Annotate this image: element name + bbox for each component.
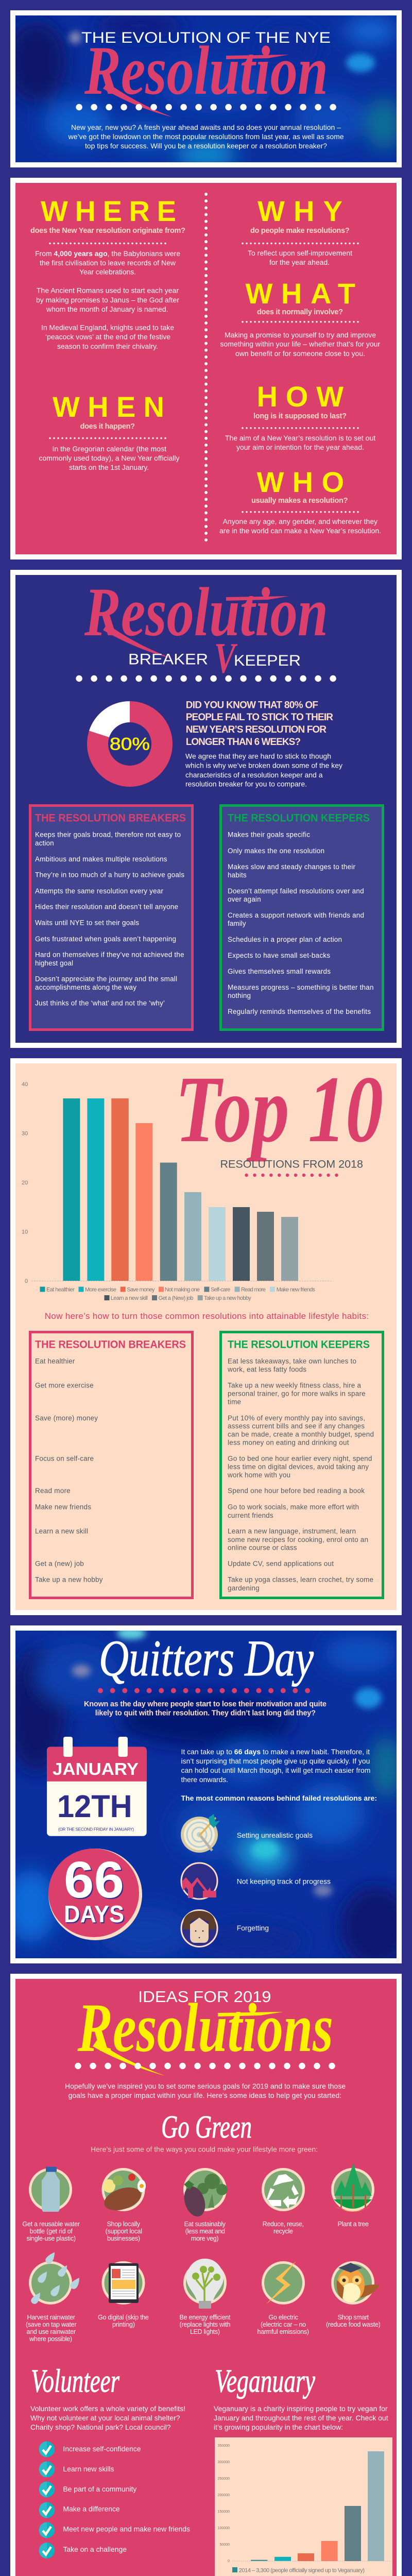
- did you know heading: PEOPLE FAIL TO STICK TO THEIR: [186, 712, 333, 723]
- checklist: Increase self-confidence: [63, 2445, 141, 2453]
- box: keepers list: Update CV, send applications out: [228, 1560, 334, 1567]
- did you know heading: LONGER THAN 6 WEEKS?: [186, 737, 301, 748]
- checklist: Make a difference: [63, 2505, 120, 2513]
- box: resolution breakers: Gets frustrated when goals aren’t happening: [35, 935, 176, 943]
- block: when: starts on the 1st January.: [69, 463, 149, 471]
- box: resolution keepers: [220, 806, 383, 1029]
- subheading: go green: Go Green: [161, 2110, 252, 2145]
- box: resolution breakers: Doesn’t appreciate the journey and the small: [35, 975, 177, 983]
- box: resolution keepers: Makes slow and steady changes to their: [228, 863, 355, 871]
- box: resolution keepers: Schedules in a proper plan of action: [228, 936, 342, 943]
- calendar icon: (OR THE SECOND FRIDAY IN JANUARY): [58, 1827, 134, 1832]
- chart legend: Read more: [241, 1287, 266, 1293]
- block: when: commonly used today), a New Year officially: [39, 454, 179, 462]
- script title: Resolutions: [77, 1990, 333, 2066]
- box: keepers list: time: [228, 1398, 241, 1406]
- section: volunteer: Why not volunteer at your local animal shelter?: [30, 2414, 180, 2422]
- did you know heading: DID YOU KNOW THAT 80% OF: [186, 700, 318, 710]
- bar chart: top 10: 0: [25, 1278, 28, 1284]
- icon: lightning: [263, 2261, 304, 2304]
- label: [26, 2314, 76, 2343]
- box: keepers list: Eat less takeaways, take own lunches to: [228, 1357, 356, 1365]
- block: why: do people make resolutions?: [250, 227, 350, 235]
- label: [22, 2221, 80, 2242]
- block: how: your aim or intention for the year ahead.: [236, 443, 364, 451]
- icon: rainwater: [30, 2252, 79, 2304]
- 66 days badge: DAYS: [64, 1901, 124, 1927]
- section: veganuary: January and throughout the rest of the year. Check out: [214, 2414, 388, 2422]
- habit text: isn’t surprising that most people give up quite quickly. If you: [181, 1757, 370, 1765]
- chart legend: Self-care: [211, 1287, 230, 1293]
- bar chart: veganuary: 350000: [218, 2444, 230, 2448]
- chart legend: [40, 1287, 315, 1301]
- box: keepers list: work home with you: [227, 1471, 290, 1479]
- block: who: [219, 466, 381, 535]
- box: keepers list: some new recipes for cooking, enrol onto an: [228, 1536, 368, 1544]
- block: where: [30, 195, 185, 350]
- box: keepers list: personal trainer, go for more walks in spare: [228, 1390, 366, 1398]
- block: what: does it normally involve?: [257, 308, 343, 316]
- label: [184, 2221, 226, 2242]
- label: [326, 2314, 381, 2328]
- habit text: It can take up to 66 days to make a new habit. Therefore, it: [181, 1748, 370, 1756]
- block: where: the first civilisation to leave records of New: [40, 259, 176, 267]
- chart legend: Take up a new hobby: [204, 1295, 251, 1301]
- box: resolution breakers: accomplishments along the way: [35, 984, 136, 991]
- block: when: WHEN: [53, 391, 164, 423]
- label: (save on tap water: [26, 2321, 76, 2328]
- box: breakers list: Get a (new) job: [35, 1560, 84, 1567]
- breaker v keeper heading: BREAKER: [128, 651, 208, 668]
- chart legend: Eat healthier: [46, 1287, 75, 1293]
- section: volunteer: Volunteer work offers a whole variety of benefits!: [30, 2404, 185, 2413]
- explanation text: [185, 752, 342, 788]
- block: where: The Ancient Romans used to start each year: [37, 286, 179, 295]
- box: keepers list: Put 10% of every monthly pay into savings,: [228, 1414, 365, 1422]
- icon: tablet: [103, 2263, 144, 2303]
- explanation text: characteristics of a resolution keeper and a: [185, 771, 323, 779]
- block: where: does the New Year resolution originate from?: [30, 227, 185, 235]
- callout line: Now here’s how to turn those common resolutions into attainable lifestyle habits:: [45, 1311, 369, 1321]
- block: how: HOW: [256, 380, 344, 413]
- section: veganuary: [214, 2363, 392, 2576]
- box: resolution breakers: They’re in too much of a hurry to achieve goals: [35, 871, 184, 879]
- icon: vegetables: [181, 2169, 228, 2219]
- block: why: WHY: [258, 195, 342, 227]
- label: and use rainwater: [27, 2328, 76, 2335]
- bar chart: top 10: 10: [22, 1229, 28, 1235]
- block: where: In Medieval England, knights used to take: [41, 324, 174, 332]
- bar chart: veganuary: 150000: [218, 2510, 230, 2514]
- chart legend: More exercise: [85, 1287, 116, 1293]
- bokeh background: [15, 1631, 397, 1958]
- box: resolution keepers: nothing: [228, 992, 251, 999]
- breaker v keeper heading: [128, 634, 301, 682]
- script title: Resolution: [84, 574, 328, 651]
- label: Shop locally: [107, 2221, 141, 2228]
- label: [258, 2314, 309, 2335]
- label: printing): [112, 2321, 135, 2328]
- box: breakers list: Learn a new skill: [35, 1528, 88, 1535]
- block: where: by making promises to Janus – the God after: [36, 296, 179, 304]
- block: where: whom the month of January is named.: [46, 305, 168, 313]
- block: who: Anyone any age, any gender, and wherever they: [223, 517, 377, 526]
- section: volunteer: [30, 2363, 190, 2558]
- icon: forgetting face: [181, 1910, 217, 1946]
- box: resolution breakers: Just thinks of the ‘what’ and not the ‘why’: [35, 999, 165, 1007]
- label: Reduce, reuse,: [263, 2221, 304, 2228]
- icon: recycle: [263, 2169, 304, 2210]
- box: resolution keepers: habits: [228, 871, 247, 879]
- box: breakers list: Get more exercise: [35, 1382, 94, 1389]
- box: keepers list: less time on digital devices, avoid taking any: [228, 1463, 369, 1471]
- section: volunteer: Charity shop? National park? Local council?: [30, 2423, 171, 2431]
- bar chart: top 10: [22, 1081, 333, 1284]
- block: where: ‘peacock vows’ at the end of the festive: [45, 333, 170, 341]
- label: [179, 2314, 231, 2335]
- bokeh background: [5, 13, 401, 167]
- block: where: WHERE: [41, 195, 176, 227]
- box: resolution breakers: Hides their resolution and doesn’t tell anyone: [35, 903, 178, 911]
- habit text: can hold out until March though, it will get much easier from: [181, 1766, 370, 1774]
- icon: progress: [181, 1863, 217, 1899]
- label: Go electric: [268, 2314, 298, 2321]
- section: volunteer: Volunteer: [31, 2363, 120, 2399]
- label: where possible): [29, 2335, 72, 2343]
- block: what: WHAT: [245, 277, 355, 310]
- box: keepers list: less money on eating and drinking out: [228, 1439, 349, 1447]
- bar chart: veganuary: 200000: [218, 2494, 230, 2497]
- label: (less meat and: [185, 2228, 225, 2235]
- reason: unrealistic goals: Setting unrealistic goals: [237, 1831, 313, 1839]
- checklist: Meet new people and make new friends: [63, 2525, 190, 2533]
- box: breakers list: Eat healthier: [35, 1357, 75, 1365]
- heading: THE EVOLUTION OF THE NYE: [81, 29, 331, 46]
- box: resolution keepers: Only makes the one resolution: [228, 847, 324, 855]
- label: bottle (get rid of: [30, 2228, 73, 2235]
- box: breakers list: Focus on self-care: [35, 1455, 94, 1462]
- checklist: Learn new skills: [63, 2465, 114, 2473]
- block: what: Making a promise to yourself to try and improve: [225, 331, 376, 339]
- calendar icon: JANUARY: [53, 1759, 139, 1778]
- block: what: own benefit or for someone close to you.: [235, 349, 365, 358]
- bar chart: veganuary: 300000: [218, 2461, 230, 2464]
- bar chart: veganuary: 50000: [220, 2543, 230, 2547]
- block: what: something within your life – whether that’s for your: [220, 340, 380, 348]
- box: resolution breakers: highest goal: [35, 959, 73, 967]
- block: when: In the Gregorian calendar (the most: [53, 445, 166, 453]
- explanation text: which is why we’ve broken down some of the key: [185, 761, 342, 770]
- checklist: Take on a challenge: [63, 2545, 127, 2553]
- icon: owl: [333, 2263, 380, 2303]
- label: Harvest rainwater: [27, 2314, 75, 2321]
- block: how: [225, 380, 375, 451]
- box: resolution breakers: [30, 806, 193, 1029]
- box: keepers list: Spend one hour before bed reading a book: [228, 1487, 365, 1495]
- box: resolution keepers: THE RESOLUTION KEEPERS: [228, 812, 370, 824]
- intro: Hopefully we’ve inspired you to set some serious goals for 2019 and to make sure those: [65, 2082, 346, 2090]
- breaker v keeper heading: V: [214, 634, 237, 682]
- box: breakers list: Save (more) money: [35, 1414, 98, 1422]
- block: when: [39, 391, 179, 471]
- section: veganuary: it’s growing popularity in the chart below:: [214, 2423, 343, 2431]
- box: resolution keepers: Gives themselves small rewards: [228, 968, 331, 975]
- intro text: top tips for success. Will you be a resolution keeper or a resolution breaker?: [85, 142, 327, 150]
- label: [263, 2221, 304, 2235]
- box: resolution keepers: over again: [228, 895, 261, 903]
- habit text: [181, 1748, 377, 1802]
- box: keepers list: Learn a new language, instrument, learn: [228, 1528, 356, 1535]
- calendar icon: [47, 1737, 147, 1836]
- label: Eat sustainably: [184, 2221, 226, 2228]
- label: Shop smart: [338, 2314, 369, 2321]
- box: resolution keepers: Expects to have small set-backs: [228, 952, 330, 959]
- habit text: there onwards.: [181, 1775, 228, 1784]
- panel: title hero: [5, 10, 402, 167]
- intro: [84, 1700, 327, 1718]
- box: keepers list: current friends: [228, 1512, 273, 1519]
- label: Go digital (skip the: [98, 2314, 149, 2321]
- reason: forgetting: Forgetting: [237, 1924, 269, 1932]
- intro: goals have a proper impact within your life. Here’s some ideas to help get you started:: [68, 2091, 341, 2099]
- box: resolution breakers: Ambitious and makes multiple resolutions: [35, 855, 167, 863]
- box: keepers list: Go to work socials, make more effort with: [228, 1503, 359, 1511]
- block: why: for the year ahead.: [269, 258, 330, 266]
- subheading: go green: Here’s just some of the ways you could make your lifestyle more green:: [91, 2145, 318, 2154]
- box: resolution keepers: family: [228, 920, 246, 927]
- icon: energy bulb: [184, 2259, 226, 2309]
- label: recycle: [273, 2228, 293, 2235]
- label: LED lights): [190, 2328, 220, 2335]
- label: harmful emissions): [258, 2328, 309, 2335]
- block: why: To reflect upon self-improvement: [248, 249, 352, 257]
- bar chart: top 10: 20: [22, 1180, 28, 1186]
- icon: target: [181, 1814, 220, 1853]
- box: breakers list: [30, 1332, 193, 1598]
- block: who: WHO: [256, 466, 344, 498]
- box: breakers list: Read more: [35, 1487, 71, 1495]
- intro text: New year, new you? A fresh year ahead awaits and so does your annual resolution –: [71, 123, 341, 131]
- subtitle: RESOLUTIONS FROM 2018: [220, 1158, 363, 1171]
- box: keepers list: online course or class: [228, 1544, 297, 1552]
- label: (electric car – no: [261, 2321, 306, 2328]
- 66 days badge: DAYS: [65, 1902, 125, 1928]
- block: where: From 4,000 years ago, the Babylonians were: [35, 249, 180, 258]
- panel: breaker v keeper: [10, 570, 402, 1048]
- label: (replace lights with: [179, 2321, 231, 2328]
- block: when: does it happen?: [80, 422, 135, 431]
- label: (support local: [106, 2228, 142, 2235]
- label: [98, 2314, 149, 2328]
- box: keepers list: [220, 1332, 383, 1598]
- bar chart: veganuary: 100000: [218, 2527, 230, 2530]
- calendar icon: 12TH: [57, 1789, 132, 1824]
- intro: likely to quit with their resolution. They didn’t last long did they?: [95, 1709, 316, 1718]
- panel: ideas for 2019: [10, 1974, 402, 2576]
- 66 days badge: 66: [64, 1851, 124, 1909]
- box: breakers list: THE RESOLUTION BREAKERS: [35, 1338, 186, 1350]
- label: single-use plastic): [27, 2235, 76, 2242]
- box: resolution keepers: Creates a support network with friends and: [228, 911, 364, 919]
- bar chart: veganuary: [215, 2437, 392, 2576]
- box: breakers list: Make new friends: [35, 1503, 91, 1511]
- icon: local food: [101, 2169, 146, 2214]
- label: businesses): [107, 2235, 140, 2242]
- reason: tracking: Not keeping track of progress: [237, 1877, 331, 1886]
- box: resolution breakers: Keeps their goals broad, therefore not easy to: [35, 831, 181, 839]
- chart legend: Learn a new skill: [111, 1295, 148, 1301]
- box: resolution keepers: Makes their goals specific: [228, 831, 310, 839]
- bar chart: veganuary: 250000: [218, 2477, 230, 2481]
- script title: [77, 1990, 333, 2076]
- box: keepers list: gardening: [228, 1584, 260, 1592]
- bar chart: top 10: 40: [22, 1081, 28, 1088]
- checklist: Be part of a community: [63, 2485, 136, 2493]
- panel: where why what when how who: [10, 178, 402, 560]
- checklist: [39, 2442, 190, 2558]
- label: [106, 2221, 142, 2242]
- intro: [65, 2082, 346, 2099]
- label: Be energy efficient: [179, 2314, 231, 2321]
- chart legend: Make new friends: [277, 1287, 315, 1293]
- section: veganuary: Veganuary is a charity inspiring people to try vegan for: [214, 2404, 388, 2413]
- box: keepers list: assess current bills and see if any changes: [228, 1422, 365, 1430]
- box: resolution keepers: Regularly reminds themselves of the benefits: [228, 1008, 371, 1015]
- box: keepers list: work, eat less fatty foods: [227, 1366, 306, 1374]
- intro text: [68, 123, 344, 150]
- did you know heading: NEW YEAR’S RESOLUTION FOR: [186, 724, 327, 735]
- block: who: usually makes a resolution?: [251, 497, 348, 505]
- block: where: Year celebrations.: [79, 268, 136, 276]
- box: keepers list: Go to bed one hour earlier every night, spend: [228, 1455, 372, 1462]
- box: resolution breakers: action: [35, 839, 54, 847]
- 66 days badge: [48, 1849, 142, 1940]
- box: resolution keepers: Measures progress – something is better than: [228, 984, 374, 991]
- donut chart 80%: [89, 701, 162, 776]
- box: keepers list: Take up yoga classes, learn crochet, try some: [228, 1576, 373, 1584]
- chart legend: Save money: [127, 1287, 155, 1293]
- box: keepers list: can be made, create a monthly budget, spend: [228, 1430, 374, 1438]
- label: Plant a tree: [338, 2221, 369, 2228]
- section: veganuary: Veganuary: [215, 2363, 315, 2399]
- script title: Quitters Day: [99, 1630, 314, 1687]
- chart legend: Not making one: [165, 1287, 200, 1293]
- block: where: season to confirm their chivalry.: [57, 342, 158, 350]
- box: resolution breakers: Attempts the same resolution every year: [35, 887, 164, 895]
- box: keepers list: THE RESOLUTION KEEPERS: [228, 1338, 370, 1350]
- script title: Resolution: [84, 32, 328, 109]
- box: resolution keepers: Doesn’t attempt failed resolutions over and: [228, 887, 364, 895]
- bar chart: veganuary: 0: [228, 2560, 230, 2563]
- block: who: are in the world can make a New Year’s resolution.: [219, 527, 381, 535]
- box: resolution breakers: THE RESOLUTION BREAKERS: [35, 812, 186, 824]
- panel: top 10 resolutions: [10, 1057, 402, 1615]
- label: (reduce food waste): [326, 2321, 381, 2328]
- block: how: long is it supposed to last?: [253, 412, 347, 420]
- intro: Known as the day where people start to lose their motivation and quite: [84, 1700, 327, 1708]
- icon: trees: [333, 2163, 373, 2212]
- bar chart: top 10: 30: [22, 1131, 28, 1137]
- panel: quitters day: [5, 1625, 412, 1968]
- explanation text: We agree that they are hard to stick to though: [185, 752, 331, 760]
- block: how: The aim of a New Year’s resolution is to set out: [225, 434, 375, 442]
- donut chart 80%: 80%: [110, 735, 150, 754]
- box: keepers list: Take up a new weekly fitness class, hire a: [228, 1382, 361, 1389]
- breaker v keeper heading: KEEPER: [234, 652, 301, 669]
- did you know heading: [186, 700, 333, 748]
- block: what: [220, 277, 380, 358]
- heading: IDEAS FOR 2019: [138, 1988, 271, 2006]
- explanation text: resolution breaker for you to compare.: [185, 780, 307, 788]
- bar chart: veganuary: 2014 – 3,300 (people officially signed up to Veganuary): [239, 2568, 365, 2574]
- intro text: we’ve got the lowdown on the most popular resolutions from last year, as well as some: [68, 132, 344, 141]
- chart legend: Get a (New) job: [159, 1295, 194, 1301]
- subheading: go green: [91, 2110, 318, 2154]
- habit text: The most common reasons behind failed resolutions are:: [181, 1794, 377, 1802]
- 66 days badge: 66: [65, 1852, 125, 1910]
- box: resolution breakers: Hard on themselves if they’ve not achieved the: [35, 951, 184, 959]
- box: resolution breakers: Waits until NYE to set their goals: [35, 919, 139, 926]
- box: breakers list: Take up a new hobby: [35, 1576, 103, 1584]
- label: Get a reusable water: [22, 2221, 80, 2228]
- icon: water bottle: [30, 2167, 71, 2212]
- block: why: [243, 195, 358, 266]
- label: more veg): [191, 2235, 218, 2242]
